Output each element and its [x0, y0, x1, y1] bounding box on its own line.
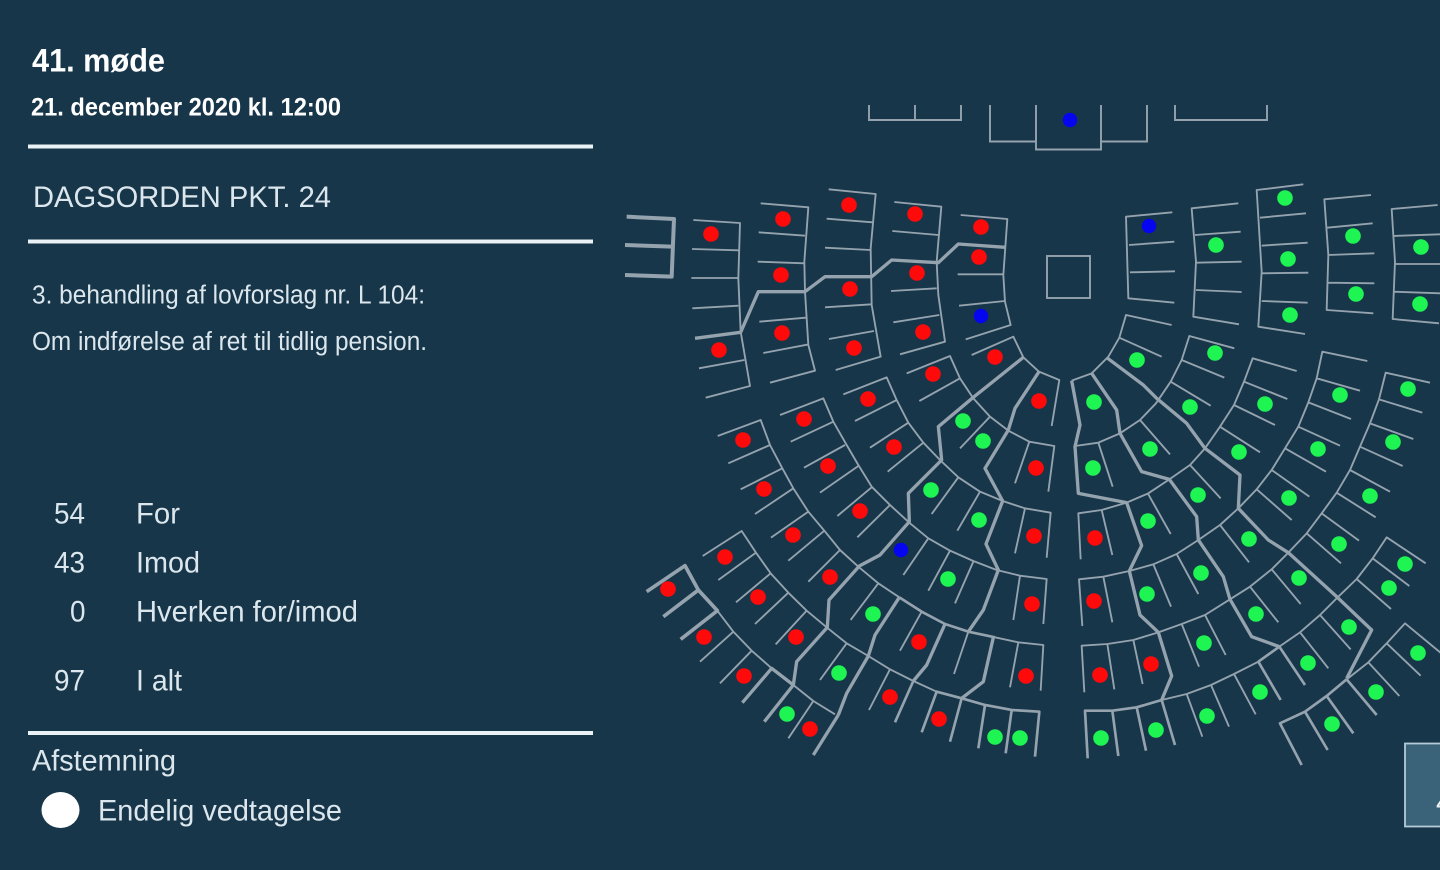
vote counts: 97 — [54, 664, 85, 698]
seats other (blue) — [894, 113, 1156, 557]
seating blocks: upper left — [625, 189, 1011, 398]
seating rows: lower left — [647, 337, 1059, 757]
chart: chamber seating plan — [625, 105, 1440, 765]
vote counts: 0 — [70, 596, 86, 628]
vote counts: I alt — [136, 664, 183, 698]
corner button — [1405, 744, 1440, 826]
vote counts — [54, 498, 358, 698]
presidium seats — [869, 105, 1267, 298]
icon: vote type marker — [42, 792, 80, 828]
title: 41. møde — [32, 42, 165, 78]
meeting date: 21. december 2020 kl. 12:00 — [31, 94, 341, 122]
vote counts: Imod — [136, 546, 200, 580]
vote counts: 43 — [54, 546, 85, 580]
vote counts: For — [136, 498, 180, 530]
seats voting for (green) — [779, 190, 1429, 746]
agenda description — [32, 282, 427, 356]
agenda heading: DAGSORDEN PKT. 24 — [33, 181, 331, 214]
vote type heading: Afstemning — [32, 744, 176, 778]
seating blocks: upper right — [1126, 184, 1440, 334]
vote counts: 54 — [54, 498, 85, 530]
agenda description: Om indførelse af ret til tidlig pension. — [32, 328, 427, 356]
seating rows: lower right — [1072, 315, 1440, 765]
vote type label: Endelig vedtagelse — [98, 794, 342, 828]
seats voting against (red) — [660, 197, 1159, 737]
vote counts: Hverken for/imod — [136, 596, 358, 628]
agenda description: 3. behandling af lovforslag nr. L 104: — [32, 282, 425, 310]
panel: meeting information — [28, 42, 593, 828]
